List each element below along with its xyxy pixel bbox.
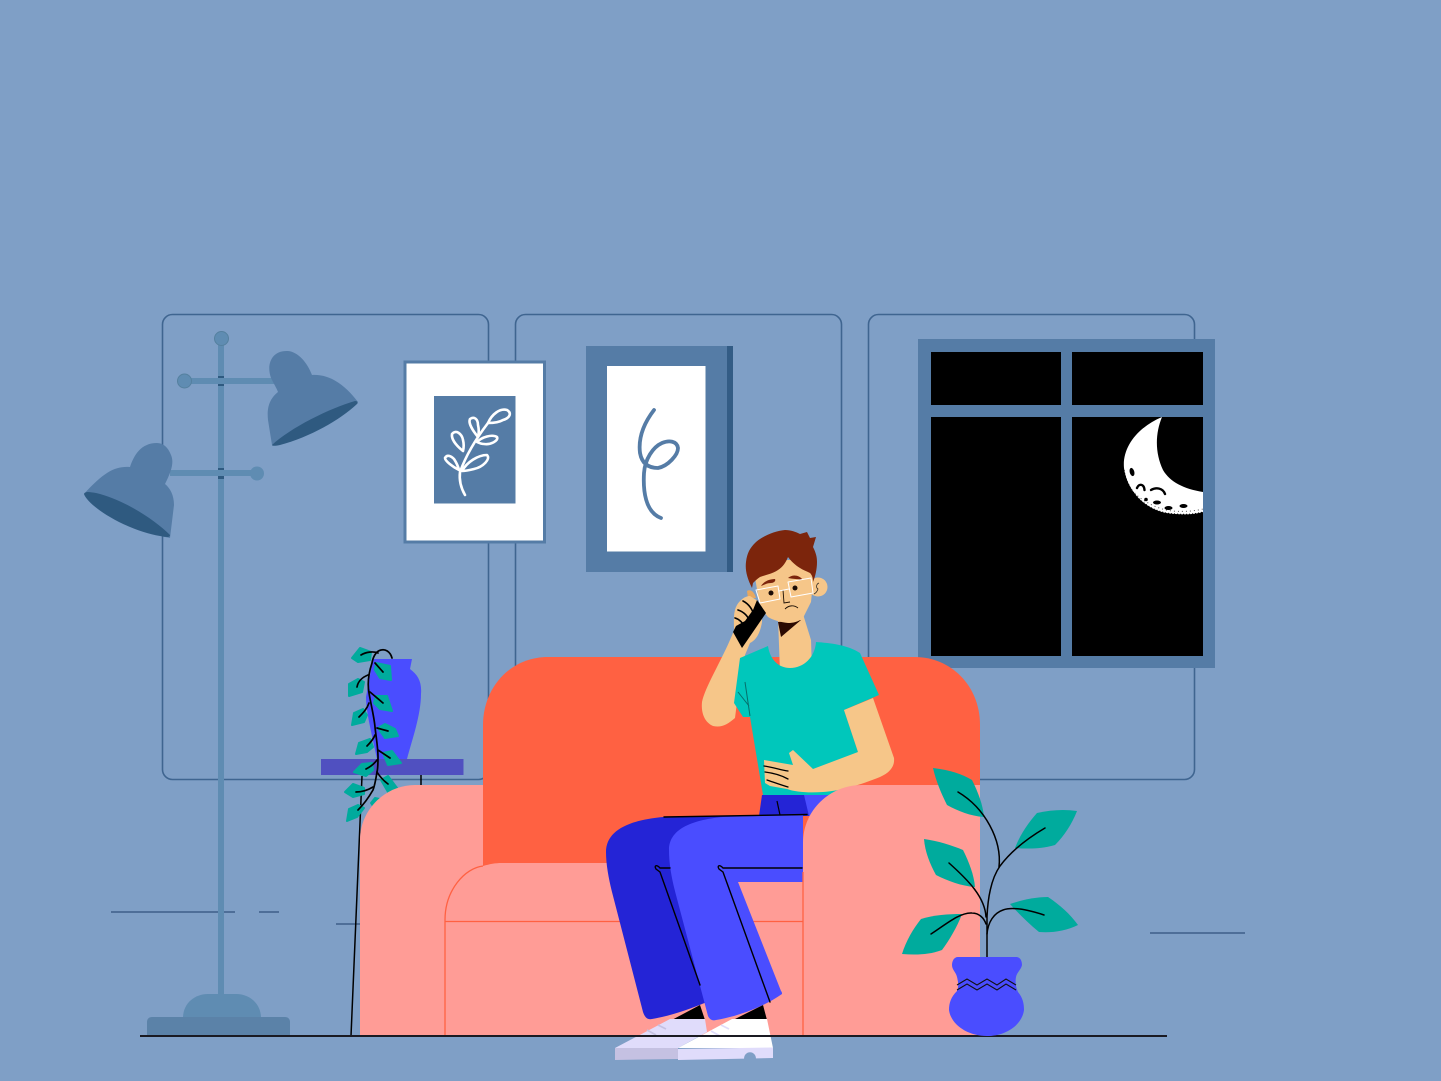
phone (733, 600, 766, 648)
floor line (140, 1035, 1167, 1037)
trouser lines (655, 814, 807, 1002)
picture frame: leaf (405, 362, 544, 542)
hair (746, 530, 817, 588)
pot (949, 957, 1024, 1036)
left arm and hand (702, 600, 762, 727)
back shoe (615, 1019, 707, 1060)
vine (345, 648, 401, 821)
sofa: seat cushion (445, 863, 810, 1036)
pot zigzag (957, 979, 1016, 990)
eyebrows (761, 579, 775, 586)
window (918, 339, 1215, 668)
sofa: back rest (483, 657, 980, 870)
picture frame: curl (586, 346, 733, 572)
back leg (606, 816, 760, 1019)
socks (668, 1005, 705, 1022)
glasses (756, 578, 813, 603)
side table with vase and vine (321, 648, 464, 1036)
front shoe (678, 1019, 773, 1060)
floor lamp (84, 332, 358, 1036)
potted plant (902, 768, 1078, 1036)
floor lines (111, 912, 1245, 933)
lamp shade: lower left (84, 443, 174, 538)
stems (931, 792, 1045, 957)
table top (321, 759, 464, 775)
nose and mouth (783, 590, 798, 609)
t-shirt (734, 642, 879, 795)
sofa: right arm (803, 785, 980, 1036)
front leg (669, 815, 803, 1020)
right arm and hand (764, 698, 894, 792)
ear (808, 578, 828, 596)
neck (778, 614, 812, 672)
face (752, 560, 813, 623)
leaves (902, 768, 1078, 955)
sofa: left arm (360, 785, 483, 1036)
eyes (768, 590, 774, 596)
moon (1124, 417, 1203, 514)
man: legs (606, 795, 835, 1060)
wall panels (162, 314, 1194, 780)
man: upper body (702, 530, 894, 795)
vase (366, 659, 421, 759)
waist (759, 795, 810, 816)
lamp shade: upper right (268, 351, 358, 446)
lamp base (147, 994, 290, 1036)
